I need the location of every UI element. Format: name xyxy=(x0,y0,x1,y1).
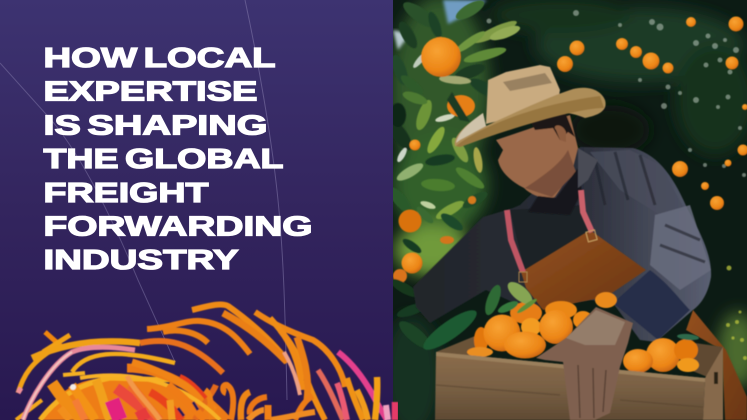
ribbons: dense core xyxy=(52,375,220,420)
apron with straps xyxy=(507,190,747,420)
title: FORWARDING xyxy=(44,210,312,242)
ribbons: back layer xyxy=(16,332,175,420)
crate with oranges xyxy=(419,278,723,420)
title xyxy=(44,42,312,275)
ribbons: upper arcs xyxy=(127,305,345,420)
leaves on crate xyxy=(423,281,538,350)
title: EXPERTISE xyxy=(44,76,258,107)
hand on crate xyxy=(536,307,633,420)
title: IS SHAPING xyxy=(44,109,268,140)
title: THE GLOBAL xyxy=(44,143,284,174)
ribbons: right strands xyxy=(270,377,377,420)
left lower branches with oranges xyxy=(393,208,463,348)
oranges in crate xyxy=(467,292,699,373)
title: INDUSTRY xyxy=(44,244,239,275)
right lower foliage xyxy=(726,266,747,360)
photo: farmer with oranges xyxy=(382,0,747,420)
straw hat xyxy=(455,65,606,147)
neck and face xyxy=(496,112,598,215)
ribbons: central curls xyxy=(195,385,268,420)
orchard background xyxy=(382,0,747,420)
title: FREIGHT xyxy=(44,177,208,208)
panel: purple title background xyxy=(0,0,393,420)
background oranges xyxy=(557,16,747,210)
title: HOW LOCAL xyxy=(44,42,276,73)
ribbons: pink and salmon xyxy=(23,347,395,420)
man: shirt and arms xyxy=(413,147,711,342)
ribbon core mass xyxy=(42,377,222,420)
ribbon burst graphic xyxy=(16,305,395,420)
bokeh highlights xyxy=(486,10,746,177)
foliage left xyxy=(384,0,522,222)
